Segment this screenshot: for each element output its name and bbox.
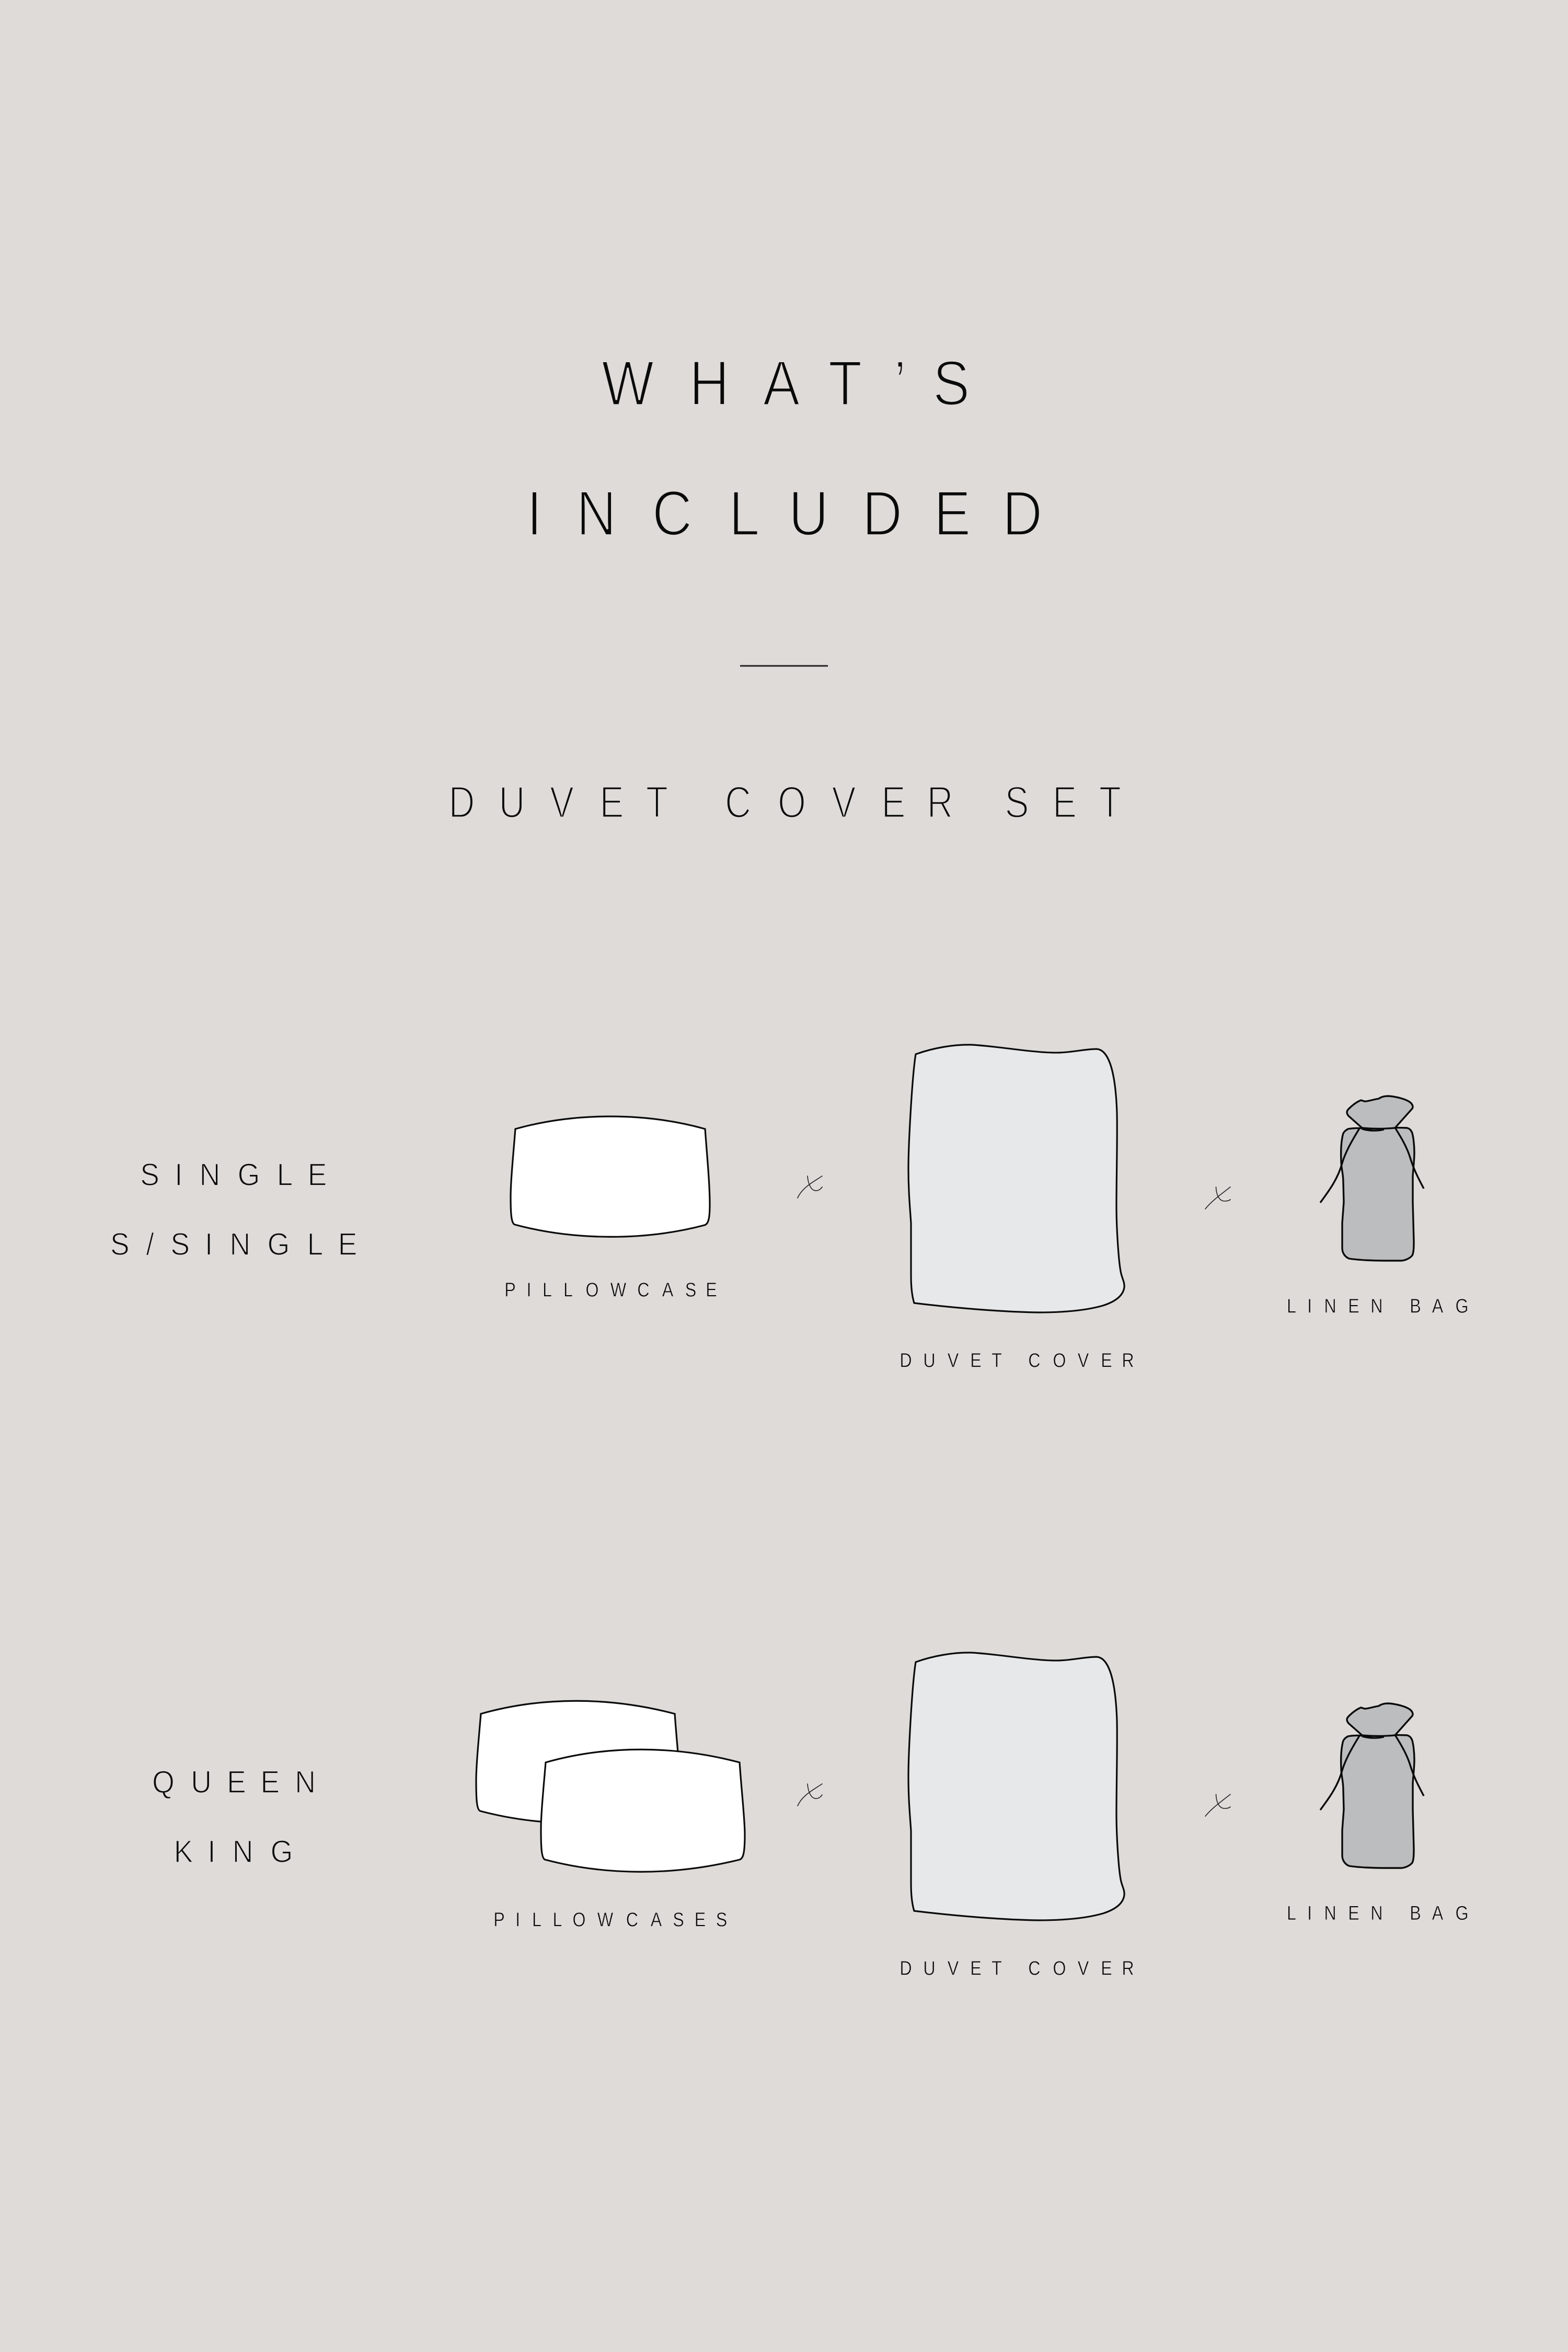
subtitle: duvet cover set: DUVET COVER SET [448,778,1121,827]
panel: single and super single set [110,1045,1469,1371]
size label: queen / king: QUEEN [152,1765,316,1800]
label: duvet cover: DUVET COVER [900,1350,1134,1371]
panel: queen and king set [152,1653,1469,1979]
icon: two pillowcases [476,1701,745,1872]
size label: queen / king: KING [174,1835,293,1870]
icon: multiply sign one [798,1176,822,1198]
size label: single / s/single: SINGLE [140,1158,327,1193]
icon: multiply sign two [1205,1794,1230,1816]
size label: queen / king [152,1765,316,1870]
title: what's included [527,348,1042,549]
title: what's included: INCLUDED [527,478,1042,549]
title: what's included: WHAT’S [602,348,970,419]
icon: linen bag [1320,1096,1424,1261]
icon: pillowcase [511,1116,710,1237]
label: pillowcase: PILLOWCASE [504,1279,717,1301]
label: linen bag: LINEN BAG [1287,1903,1469,1924]
icon: linen bag [1320,1703,1424,1868]
label: duvet cover: DUVET COVER [900,1957,1134,1979]
size label: single / s/single [110,1158,357,1262]
icon: multiply sign one [798,1784,822,1806]
icon: multiply sign two [1205,1187,1230,1209]
label: linen bag: LINEN BAG [1287,1295,1469,1317]
icon: duvet cover [908,1045,1124,1312]
size label: single / s/single: S/SINGLE [110,1227,357,1262]
icon: duvet cover [908,1653,1124,1920]
label: pillowcases: PILLOWCASES [493,1909,727,1931]
